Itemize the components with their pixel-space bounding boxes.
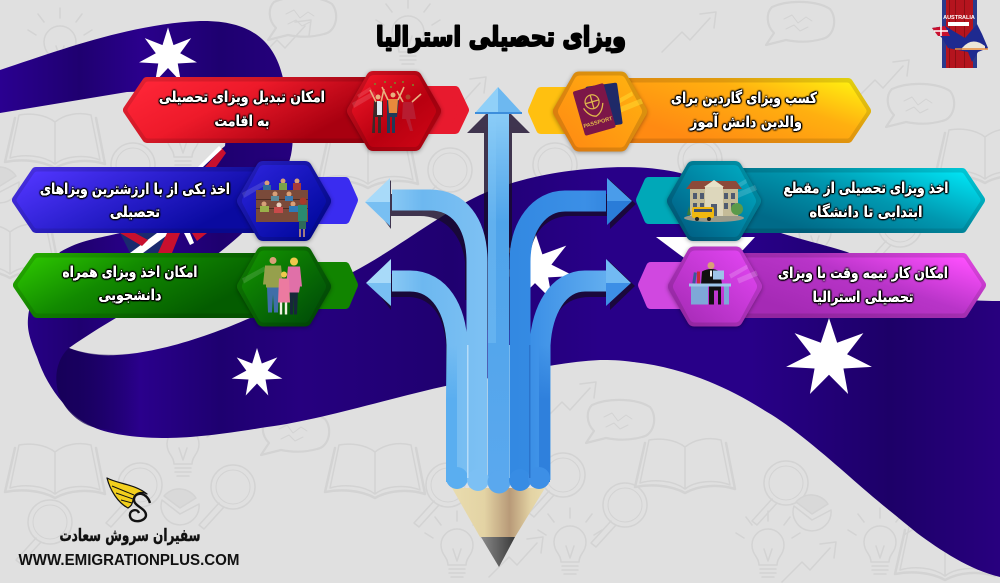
pink hexagon bbox=[675, 254, 758, 320]
orange bar bbox=[620, 83, 866, 138]
logo wing bbox=[107, 478, 147, 508]
green tab bbox=[300, 267, 353, 304]
blue bar bbox=[17, 172, 260, 228]
green text: امکان اخذ ویزای همراه bbox=[62, 263, 198, 281]
arrow shadows bbox=[372, 112, 636, 380]
arrow: lower right bbox=[540, 259, 631, 480]
icon: family bbox=[263, 257, 302, 314]
panel: residency (red) bbox=[128, 78, 464, 144]
blue text bbox=[40, 180, 230, 221]
icon: school bbox=[684, 180, 744, 222]
logo swirl bbox=[130, 494, 150, 521]
pink text: امکان کار نیمه وقت با ویزای bbox=[778, 264, 948, 282]
teal text: ابتدایی تا دانشگاه bbox=[810, 203, 922, 221]
badge: Australia bbox=[932, 0, 988, 68]
blue hexagon bbox=[242, 168, 324, 237]
badge: Australia: AUSTRALIA bbox=[943, 15, 975, 21]
logo name: سفیران سروش سعادت bbox=[60, 526, 200, 546]
orange text: کسب ویزای گاردین برای bbox=[671, 89, 817, 107]
teal bar bbox=[730, 173, 980, 228]
orange text: والدین دانش آموز bbox=[689, 113, 802, 131]
pencil wood bbox=[452, 488, 545, 537]
panel: part-time work (pink) bbox=[643, 254, 981, 320]
pink text bbox=[778, 264, 948, 306]
teal hexagon bbox=[674, 168, 757, 234]
teal text: اخذ ویزای تحصیلی از مقطع bbox=[784, 179, 948, 197]
green bar bbox=[18, 258, 260, 313]
title: ویزای تحصیلی استرالیا bbox=[376, 22, 626, 53]
red tab bbox=[380, 91, 464, 129]
green hexagon bbox=[242, 254, 324, 320]
icon: classroom bbox=[256, 178, 308, 237]
panel: school to university (teal) bbox=[641, 168, 980, 234]
icon: office worker at desk bbox=[689, 262, 731, 304]
icon: celebrating people bbox=[370, 82, 421, 133]
pencil body bbox=[446, 345, 550, 494]
logo bbox=[18, 478, 240, 569]
orange tab bbox=[533, 92, 620, 129]
red hexagon bbox=[352, 78, 434, 144]
website: WWW.EMIGRATIONPLUS.COM bbox=[18, 552, 240, 569]
blue text: اخذ یکی از با ارزشترین ویزاهای bbox=[40, 180, 230, 198]
arrow: upper right bbox=[520, 178, 632, 482]
red text: به اقامت bbox=[214, 112, 270, 130]
teal tab bbox=[641, 182, 700, 219]
pink text: تحصیلی استرالیا bbox=[812, 288, 914, 306]
blue tab bbox=[300, 182, 353, 219]
pink bar bbox=[730, 258, 981, 313]
teal text bbox=[784, 179, 948, 221]
flag fragments on ribbon bbox=[120, 146, 226, 253]
arrow: centre up bbox=[475, 87, 522, 485]
panel: valuable visas (blue) bbox=[17, 168, 353, 237]
pencil bbox=[452, 488, 545, 567]
stars bbox=[139, 27, 872, 396]
green text: دانشجویی bbox=[98, 286, 162, 304]
blue text: تحصیلی bbox=[110, 203, 160, 221]
pencil lead bbox=[481, 537, 515, 567]
red bar bbox=[128, 82, 370, 138]
icon: passports: PASSPORT bbox=[583, 116, 614, 130]
red text: امکان تبدیل ویزای تحصیلی bbox=[159, 88, 325, 106]
pink tab bbox=[643, 267, 700, 304]
orange text bbox=[671, 89, 817, 131]
arrow: upper left bbox=[365, 178, 477, 482]
arrow: lower left bbox=[366, 259, 457, 480]
green text bbox=[62, 263, 198, 304]
panel: guardian visa (orange) bbox=[533, 78, 866, 144]
red text bbox=[159, 88, 325, 130]
orange hexagon bbox=[560, 78, 643, 144]
panel: dependant visa (green) bbox=[18, 254, 353, 320]
